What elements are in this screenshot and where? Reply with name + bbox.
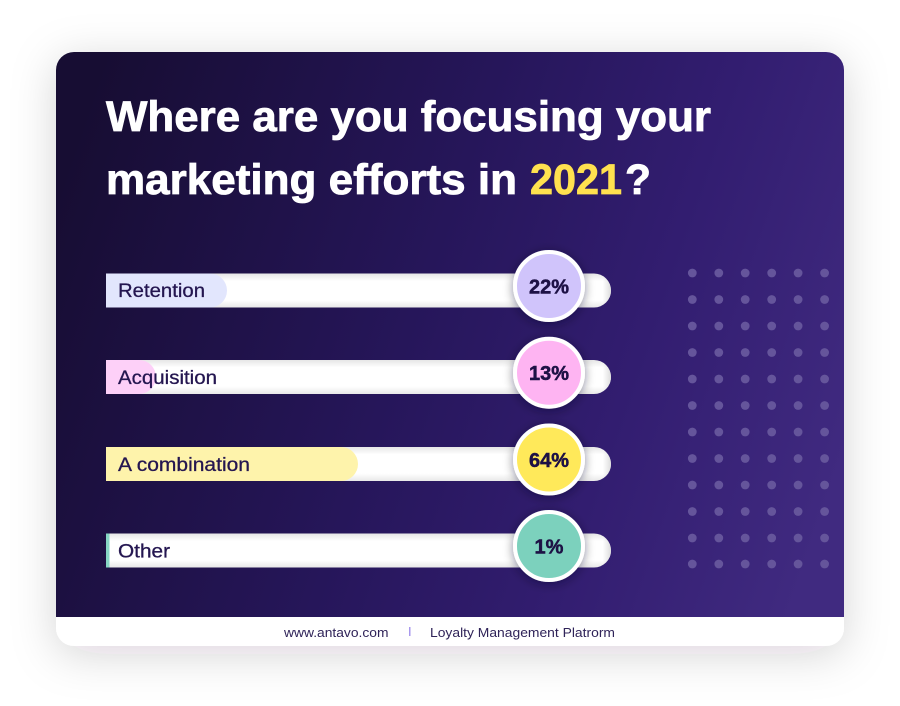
bar: Retention 22%: 22% — [529, 276, 569, 298]
purple panel — [56, 52, 844, 617]
bar: Acquisition 13% — [106, 339, 611, 407]
bar: Acquisition 13%: 13% — [529, 363, 569, 385]
card — [56, 52, 844, 646]
footer: www.antavo.com — [283, 625, 388, 640]
title: ? — [625, 156, 651, 204]
title: 2021 — [530, 156, 622, 204]
footer — [283, 625, 615, 640]
title: marketing efforts in — [106, 156, 517, 204]
bar: Retention 22% — [106, 252, 611, 320]
bar: Other 1%: 1% — [535, 536, 564, 558]
bar: Other 1% — [106, 512, 611, 580]
bar: A combination 64% — [106, 426, 611, 494]
title: Where are you focusing your — [106, 93, 711, 141]
bar: A combination 64%: A combination — [118, 454, 250, 476]
bar: A combination 64%: 64% — [529, 450, 569, 472]
bar: Other 1%: Other — [118, 540, 171, 562]
bar: Acquisition 13%: Acquisition — [118, 367, 217, 389]
title — [106, 93, 711, 204]
footer: Loyalty Management Platrorm — [430, 625, 615, 640]
bar: Retention 22%: Retention — [118, 280, 205, 302]
dot pattern — [688, 269, 829, 568]
